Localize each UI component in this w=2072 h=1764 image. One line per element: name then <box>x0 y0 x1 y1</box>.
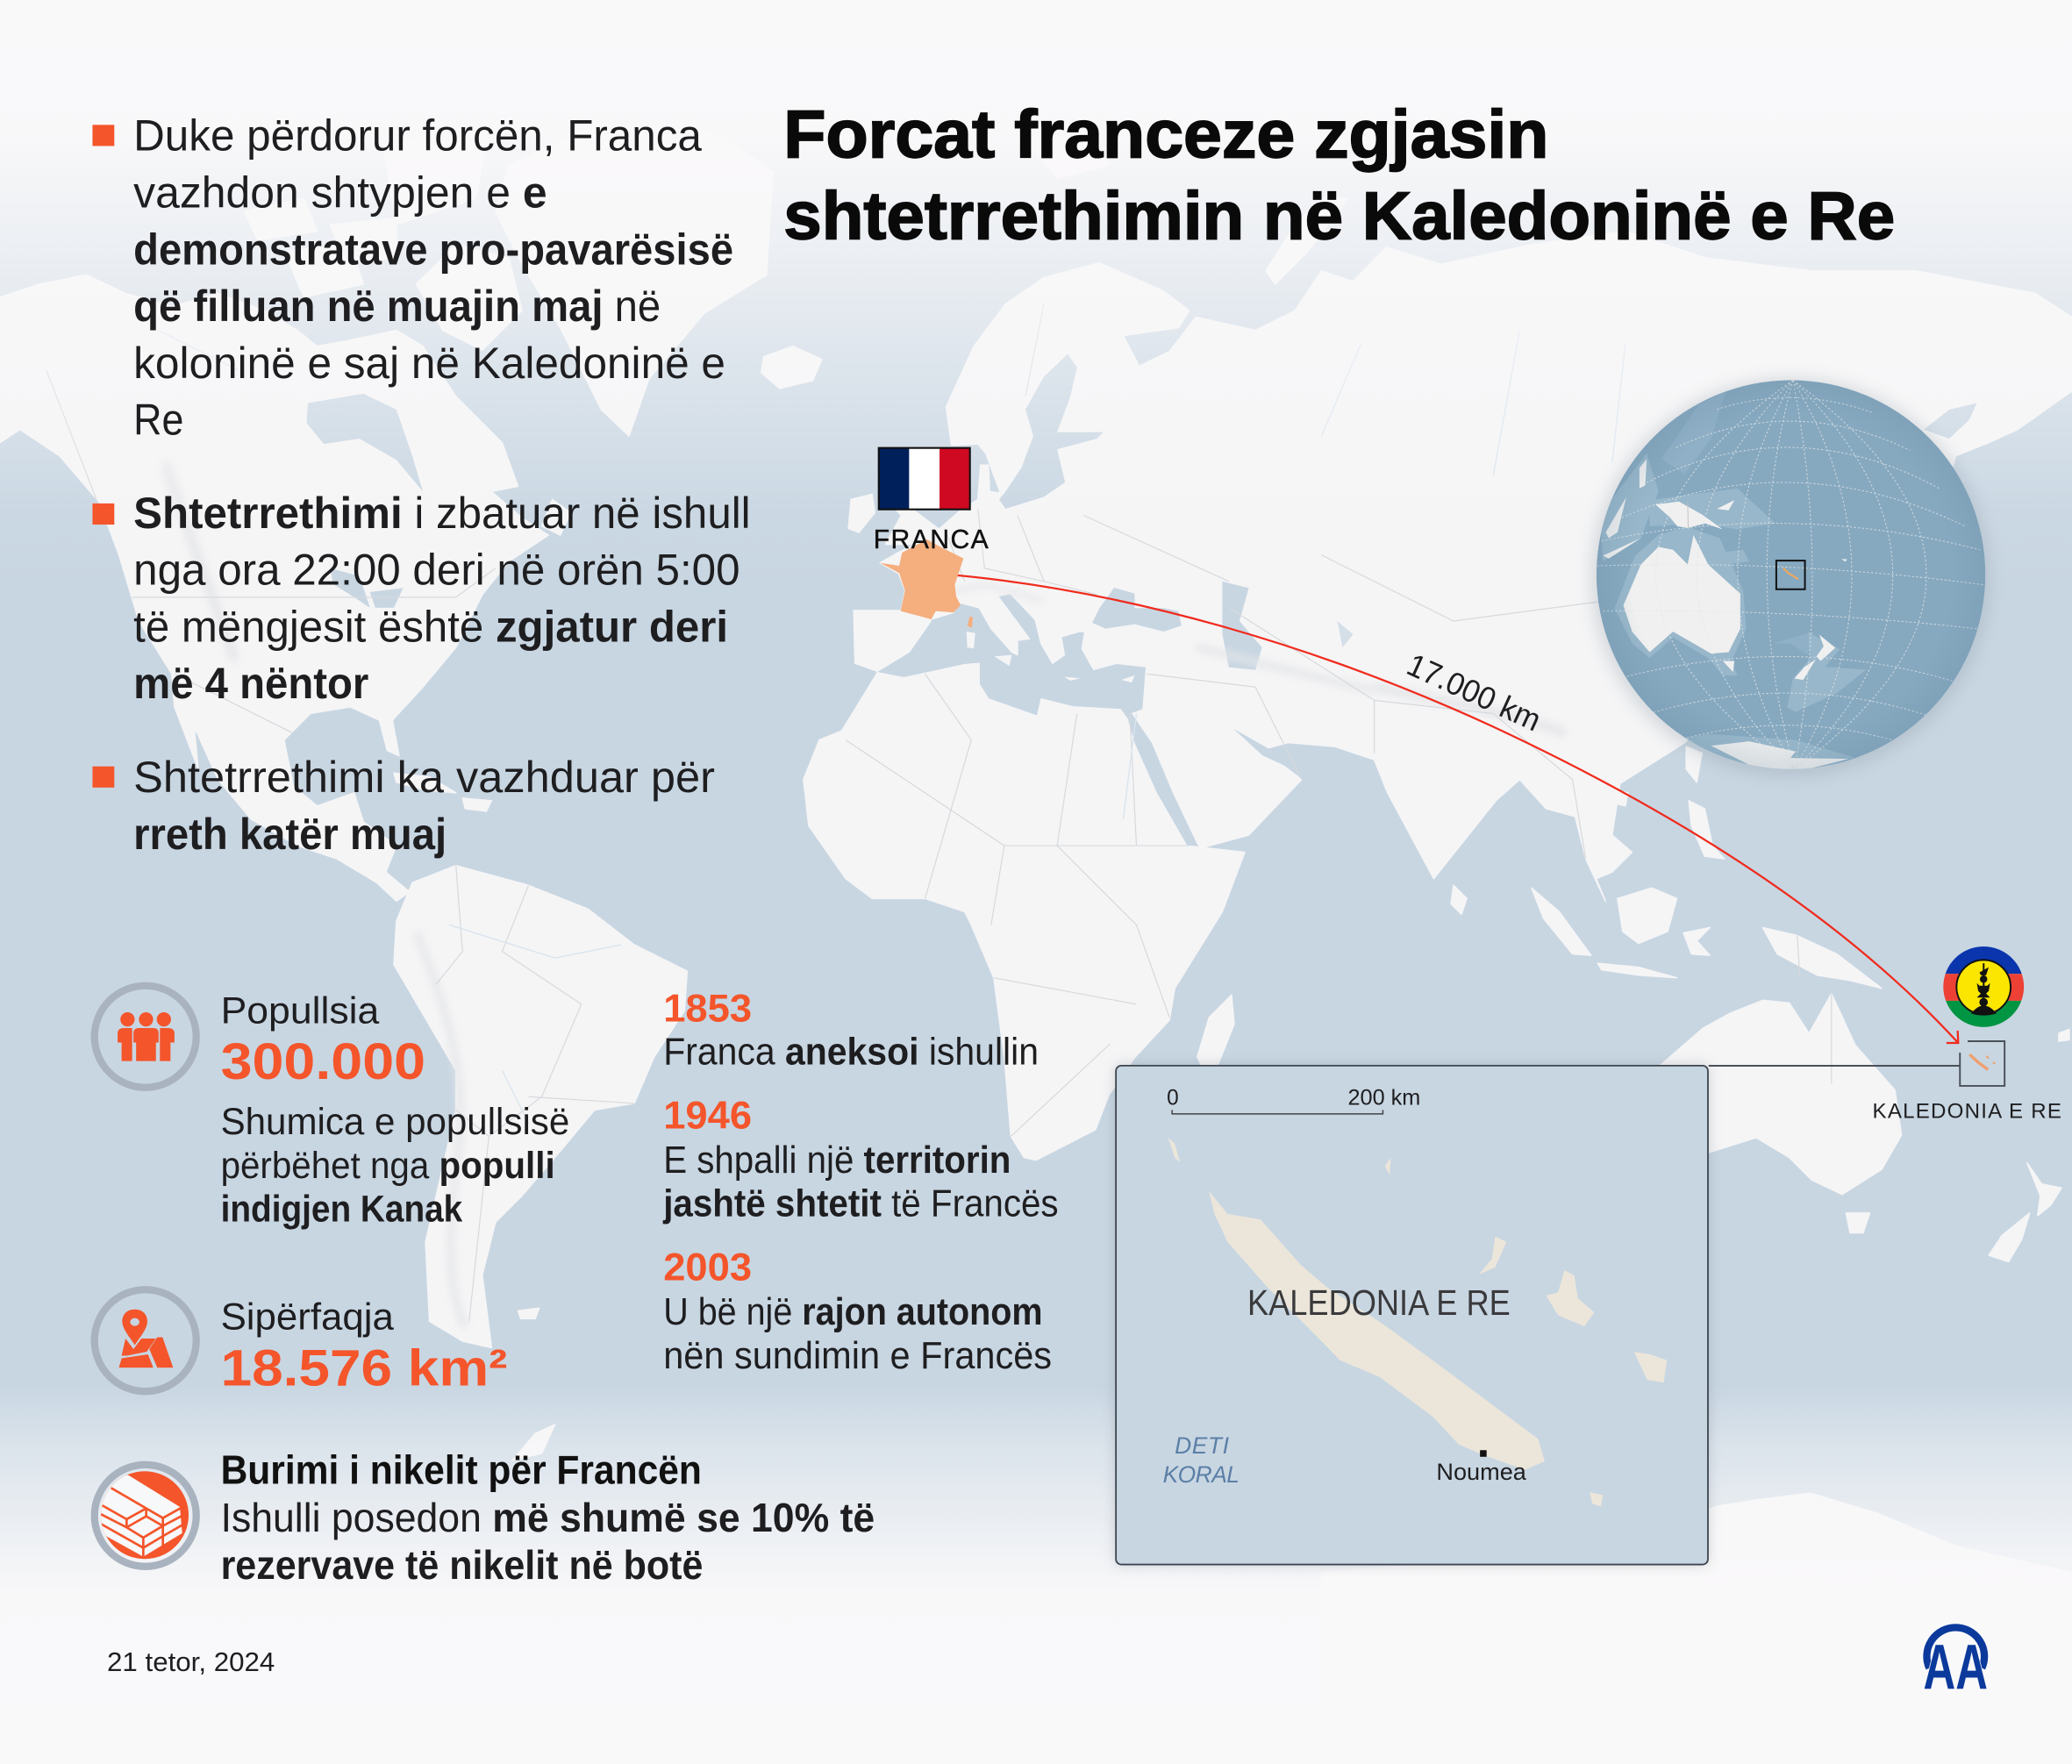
france highlighted <box>880 539 973 628</box>
globe graticule <box>1597 380 1984 769</box>
bullet text 2: më 4 nëntor <box>133 659 368 708</box>
population stat: 300.000 <box>221 1033 425 1090</box>
timeline entry 1853: Franca aneksoi ishullin <box>663 1030 1039 1073</box>
population stat <box>95 986 569 1231</box>
label: Deti Koral: DETI <box>1175 1432 1230 1459</box>
france flag <box>879 448 970 510</box>
scale bar: 200 km <box>1348 1086 1420 1110</box>
nickel stat: Burimi i nikelit për Francën <box>221 1447 702 1493</box>
population stat: përbëhet nga populli <box>221 1145 555 1187</box>
bullet text 2: Shtetrrethimi i zbatuar në ishull <box>133 489 751 538</box>
timeline entry 2003: 2003 <box>663 1246 752 1289</box>
timeline entry 2003: nën sundimin e Francës <box>663 1334 1052 1377</box>
label: Franca: FRANCA <box>874 525 990 554</box>
title: shtetrrethimin në Kaledoninë e Re <box>783 179 1895 254</box>
bullet text 3 <box>92 753 715 859</box>
Mediterranean islands <box>967 632 1134 682</box>
timeline entry 1946: jashtë shtetit të Francës <box>662 1182 1059 1225</box>
globe <box>1591 378 1990 777</box>
timeline entry 1946 <box>662 1094 1059 1225</box>
timeline entry 1853 <box>663 987 1039 1073</box>
relief shading <box>165 462 1566 1328</box>
timeline <box>662 987 1059 1377</box>
timeline entry 2003: U bë një rajon autonom <box>663 1290 1043 1333</box>
population stat: Popullsia <box>221 990 379 1032</box>
timeline entry 1946: 1946 <box>663 1094 752 1137</box>
bullet text 1: Duke përdorur forcën, Franca <box>133 111 702 161</box>
city: Noumea: Noumea <box>1436 1459 1526 1485</box>
globe locator square <box>1776 561 1805 589</box>
icon: people <box>118 1012 175 1061</box>
timeline entry 2003 <box>663 1246 1052 1377</box>
label: Kaledonia e Re locator: KALEDONIA E RE <box>1873 1099 2061 1123</box>
distance label: 17.000 km <box>1402 646 1547 738</box>
area stat <box>95 1289 507 1396</box>
bullet text 2 <box>92 489 751 708</box>
title <box>783 96 1895 254</box>
locator: connector and small box <box>1709 1041 2004 1086</box>
country borders <box>46 304 1832 1321</box>
bullet text 1: vazhdon shtypjen e e <box>133 168 547 217</box>
AA logo: AA <box>1924 1632 1988 1703</box>
nickel stat <box>95 1447 875 1588</box>
red route arrow <box>936 574 1958 1043</box>
inset map: New Caledonia <box>1115 1065 1709 1565</box>
bullet text 2: të mëngjesit është zgjatur deri <box>133 602 728 651</box>
AA logo <box>1924 1627 1988 1703</box>
population stat: Shumica e popullsisë <box>221 1101 569 1143</box>
bullet text 3: rreth katër muaj <box>133 810 447 859</box>
label: Deti Koral <box>1163 1432 1240 1488</box>
rivers and lakes <box>159 331 1625 1123</box>
scale bar <box>1167 1086 1420 1114</box>
bullet text 1 <box>92 111 733 445</box>
icon: map pin <box>119 1310 173 1368</box>
new caledonia flag <box>1942 945 2027 1030</box>
bullet text 1: koloninë e saj në Kaledoninë e <box>133 339 725 388</box>
timeline entry 1853: 1853 <box>663 987 752 1030</box>
icon: nickel plates <box>98 1471 189 1559</box>
timeline entry 1946: E shpalli një territorin <box>663 1139 1011 1182</box>
label: Kaledonia e Re: KALEDONIA E RE <box>1247 1282 1511 1323</box>
inset islands <box>1168 1138 1667 1506</box>
globe land <box>1603 459 1848 772</box>
area stat: 18.576 km² <box>221 1339 507 1396</box>
population stat: indigjen Kanak <box>221 1189 462 1231</box>
title: Forcat franceze zgjasin <box>783 96 1548 172</box>
label: Deti Koral: KORAL <box>1163 1461 1240 1488</box>
bullet text 1: demonstratave pro-pavarësisë <box>133 225 733 274</box>
bullet text 3: Shtetrrethimi ka vazhduar për <box>133 753 715 802</box>
bullet text 2: nga ora 22:00 deri në orën 5:00 <box>133 546 740 595</box>
bullet text 1: që filluan në muajin maj në <box>133 282 661 331</box>
date: 21 tetor, 2024 <box>107 1646 275 1677</box>
globe shelves <box>1600 392 1866 775</box>
nickel stat: Ishulli posedon më shumë se 10% të <box>221 1495 875 1540</box>
scale bar: 0 <box>1167 1086 1179 1110</box>
nickel stat: rezervave të nikelit në botë <box>221 1542 703 1588</box>
bullet text 1: Re <box>133 396 183 445</box>
area stat: Sipërfaqja <box>221 1296 394 1338</box>
inland seas <box>306 354 1977 670</box>
